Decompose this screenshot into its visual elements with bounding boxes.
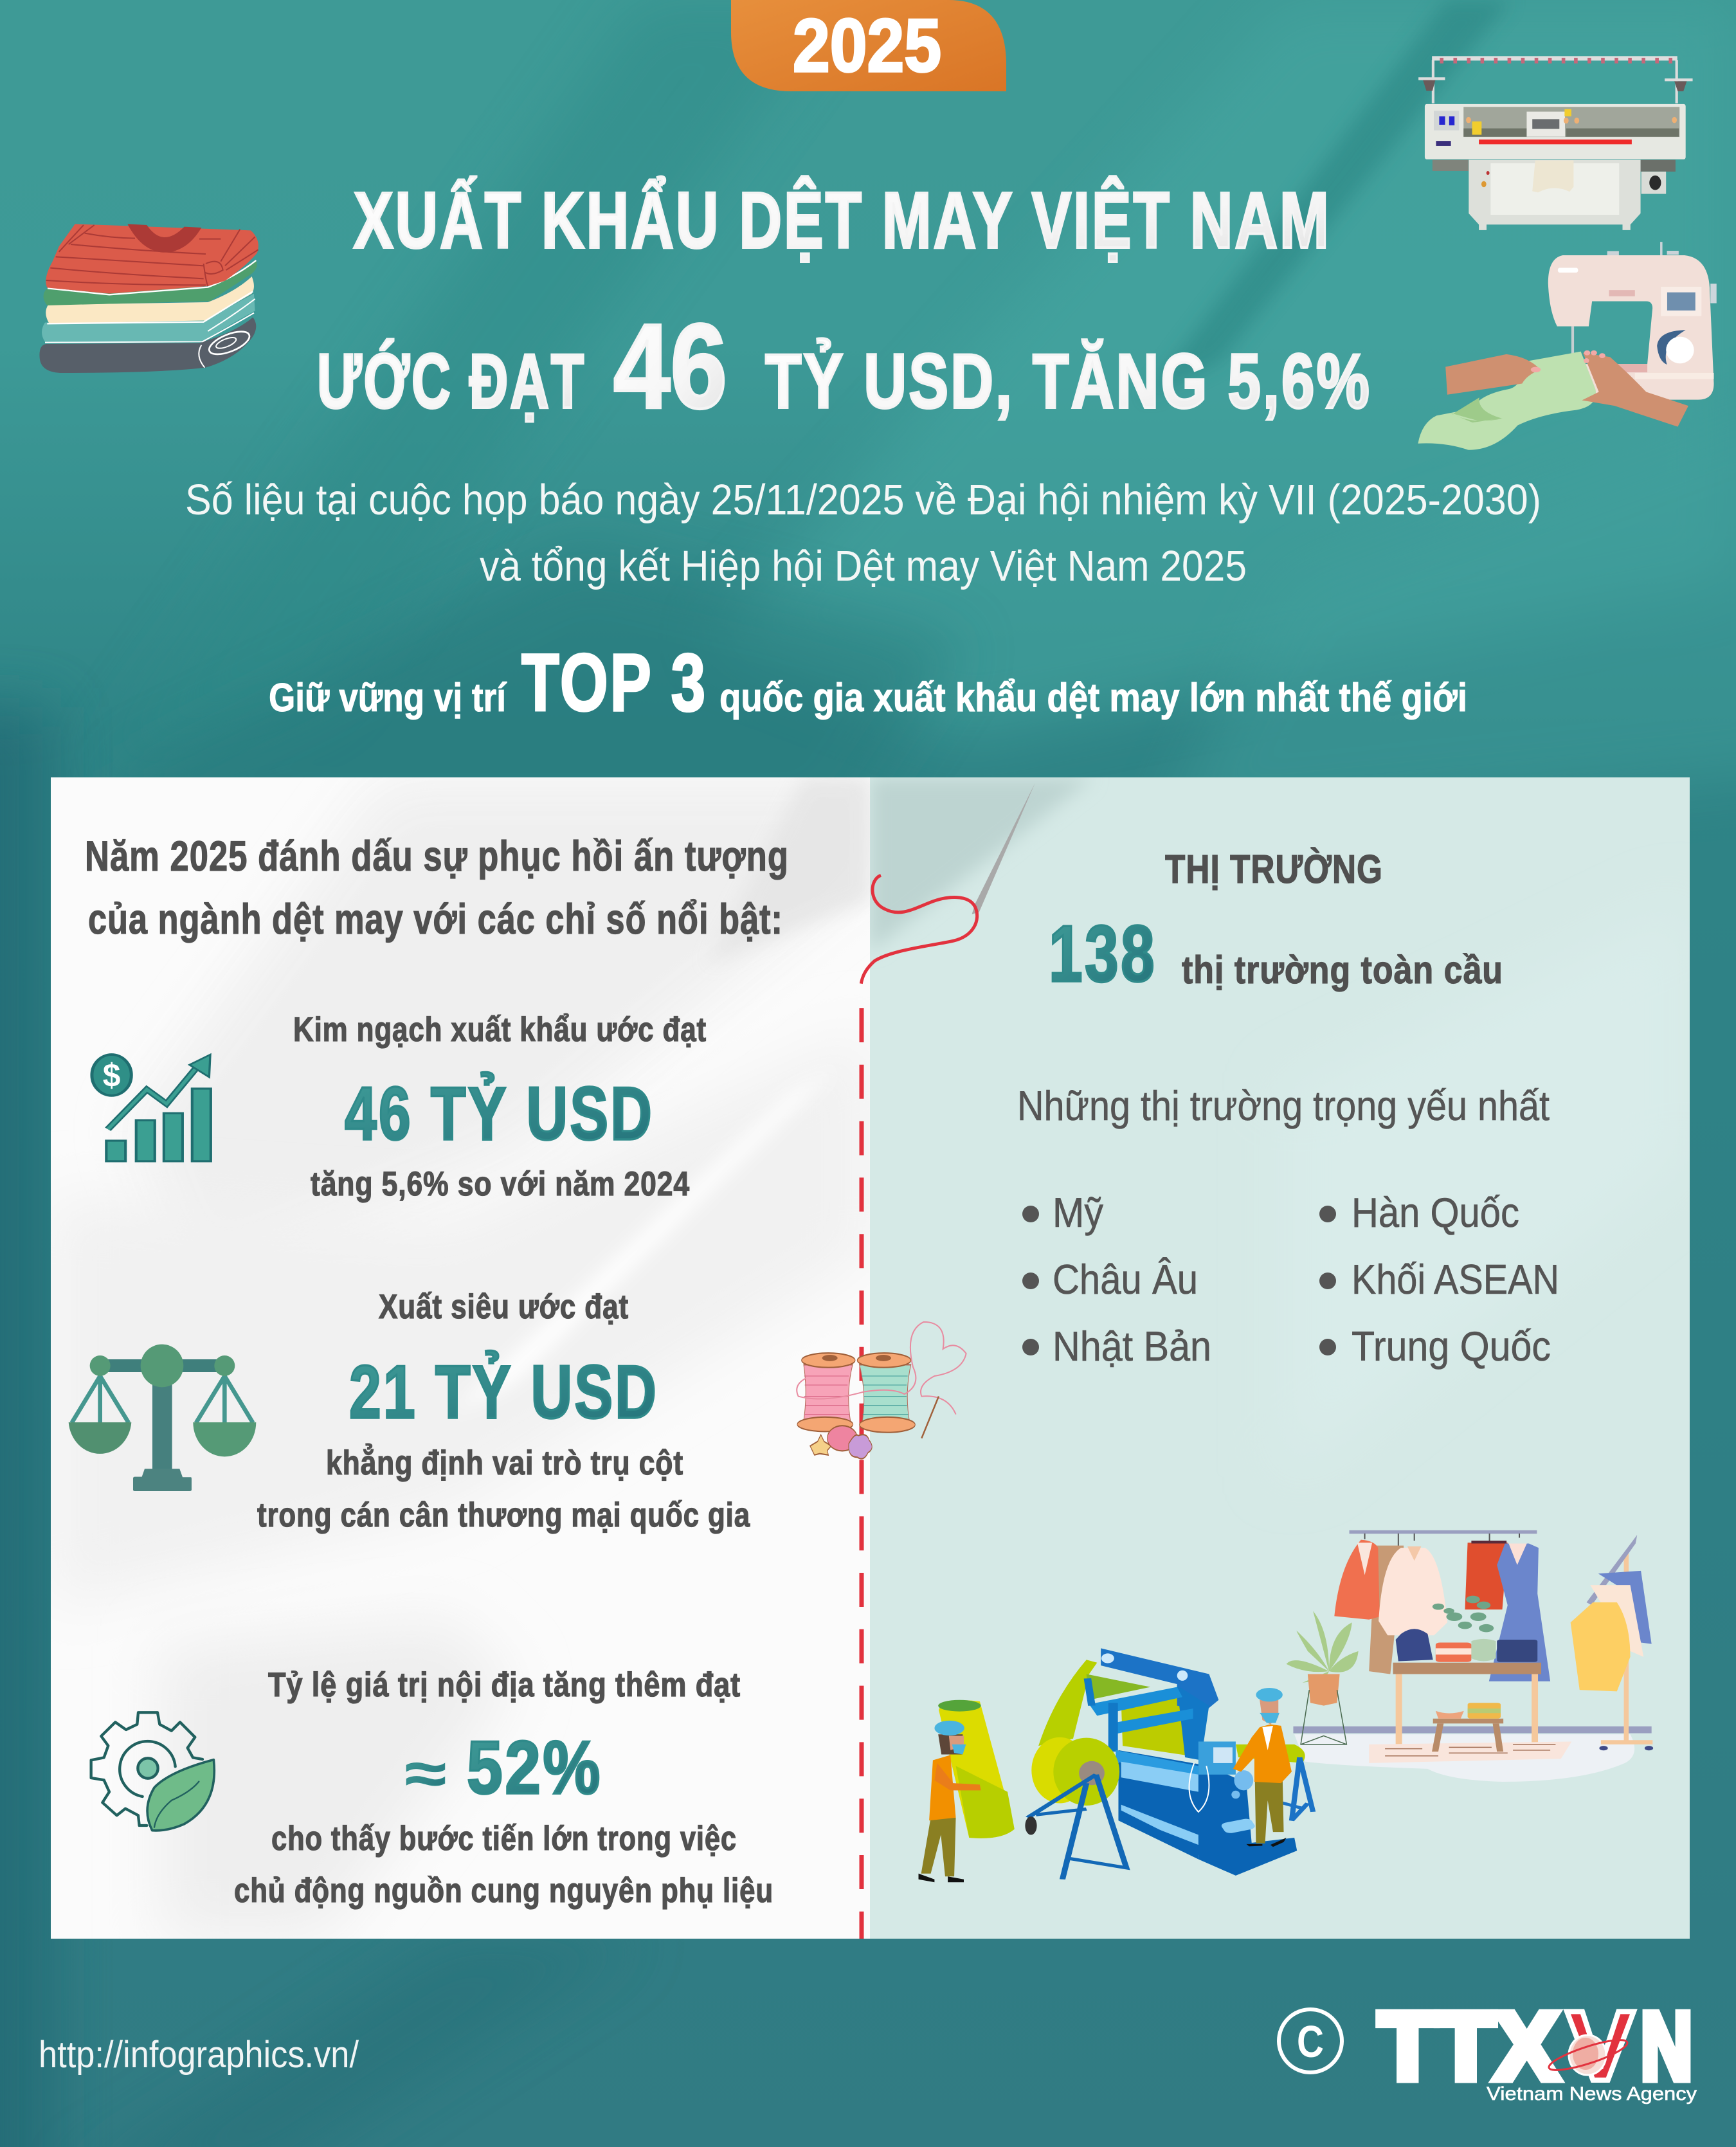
stat: domestic value share: 52% — [467, 1725, 602, 1809]
logo: TTXVN Vietnam News Agency: TTX — [1379, 1993, 1559, 2099]
stat: trade surplus: trong cán cân thương mại quốc gia — [257, 1496, 750, 1534]
market heading: THỊ TRƯỜNG — [1165, 847, 1383, 892]
stitched seam with needle and thread — [861, 783, 1035, 1939]
list: key markets: Châu Âu — [1053, 1256, 1198, 1303]
icon: flat knitting machine — [1418, 56, 1693, 230]
badge: year 2025: 2025 — [793, 3, 941, 87]
icon: sewing machine with hands — [1418, 242, 1717, 450]
stat: domestic value share — [234, 1666, 773, 1910]
list: key markets: Hàn Quốc — [1352, 1189, 1519, 1236]
stat: domestic value share: cho thấy bước tiến lớn trong việc — [271, 1820, 737, 1858]
top 3 statement: quốc gia xuất khẩu dệt may lớn nhất thế giới — [719, 676, 1467, 720]
logo: TTXVN Vietnam News Agency — [1379, 1990, 1697, 2105]
icon: copyright symbol: C — [1297, 2016, 1324, 2067]
market heading: 138 — [1049, 910, 1157, 999]
stat: domestic value share: chủ động nguồn cung nguyên phụ liệu — [234, 1872, 773, 1910]
stat: domestic value share: ≈ — [405, 1742, 446, 1806]
list: key markets: Trung Quốc — [1352, 1323, 1551, 1370]
list: key markets: Mỹ — [1053, 1189, 1103, 1236]
list: key markets: Khối ASEAN — [1352, 1256, 1559, 1303]
list: key markets: Nhật Bản — [1053, 1323, 1211, 1370]
top 3 statement: TOP 3 — [521, 637, 707, 728]
icon: thread spools and buttons — [797, 1322, 966, 1459]
subtitle: và tổng kết Hiệp hội Dệt may Việt Nam 2025 — [480, 542, 1247, 590]
illustration: clothing rack scene — [1287, 1530, 1653, 1782]
source url: http://infographics.vn/ — [39, 2034, 359, 2076]
illustration: textile machine and workers — [919, 1648, 1313, 1882]
title: XUẤT KHẨU DỆT MAY VIỆT NAM — [354, 176, 1331, 265]
stat: trade surplus: khẳng định vai trò trụ cột — [326, 1443, 683, 1482]
logo: TTXVN Vietnam News Agency: N — [1641, 1993, 1692, 2099]
title: 46 — [613, 299, 727, 433]
left panel intro — [85, 832, 789, 943]
subtitle: Số liệu tại cuộc họp báo ngày 25/11/2025 về Đại hội nhiệm kỳ VII (2025-2030) — [185, 476, 1541, 524]
icon: growth chart with dollar — [92, 1055, 211, 1161]
panel: right market panel — [870, 777, 1690, 1939]
icon: gear with leaf — [91, 1712, 214, 1831]
list: key markets — [1022, 1189, 1559, 1370]
stat: export value — [293, 1011, 707, 1203]
market heading: thị trường toàn cầu — [1182, 948, 1503, 992]
logo: TTXVN Vietnam News Agency: Vietnam News Agency — [1487, 2083, 1697, 2105]
badge: year 2025 — [731, 0, 1006, 91]
stat: export value: Kim ngạch xuất khẩu ước đạt — [293, 1011, 707, 1049]
title: ƯỚC ĐẠT — [317, 338, 586, 424]
logo: TTXVN Vietnam News Agency: V — [1566, 1990, 1634, 2101]
top 3 statement: Giữ vững vị trí — [269, 676, 507, 720]
key markets subtitle: Những thị trường trọng yếu nhất — [1017, 1082, 1550, 1129]
top 3 statement — [269, 637, 1467, 728]
stat: export value: 46 TỶ USD — [345, 1071, 654, 1155]
icon: balance scale — [69, 1345, 256, 1491]
icon: growth chart with dollar: $ — [103, 1056, 120, 1094]
left panel intro: của ngành dệt may với các chỉ số nổi bật: — [88, 895, 783, 943]
left panel intro: Năm 2025 đánh dấu sự phục hồi ấn tượng — [85, 832, 789, 880]
icon: copyright symbol — [1279, 2009, 1342, 2072]
stat: domestic value share: Tỷ lệ giá trị nội địa tăng thêm đạt — [268, 1666, 741, 1704]
stat: trade surplus: 21 TỶ USD — [349, 1350, 658, 1434]
stat: trade surplus: Xuất siêu ước đạt — [379, 1288, 629, 1326]
stat: export value: tăng 5,6% so với năm 2024 — [311, 1165, 690, 1203]
title: TỶ USD, TĂNG 5,6% — [765, 338, 1371, 424]
stat: trade surplus — [257, 1288, 750, 1534]
icon: stack of folded clothes — [39, 224, 258, 373]
subtitle — [185, 476, 1541, 590]
panel: left fabric panel — [51, 777, 870, 1939]
title — [317, 176, 1371, 433]
market heading — [1049, 847, 1503, 999]
